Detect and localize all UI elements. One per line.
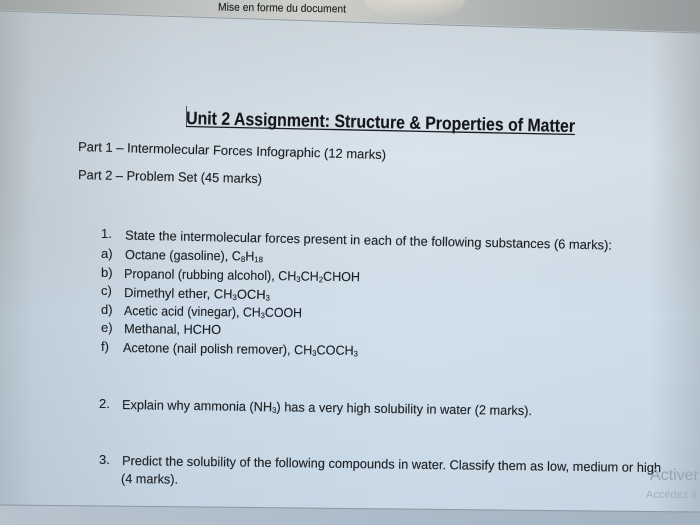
question 2: 3 [272, 406, 277, 415]
question 2 [99, 396, 532, 419]
question 2: ) has a very high solubility in water (2 marks). [276, 399, 532, 418]
title: Unit 2 Assignment: Structure & Properties of Matter [186, 108, 575, 136]
item b: 2 [319, 275, 324, 284]
item a: Octane (gasoline), C [125, 247, 244, 263]
question 1: State the intermolecular forces present in each of the following substances (6 marks): [125, 228, 612, 253]
item c: c) [101, 283, 112, 298]
question 3: Predict the solubility of the following compounds in water. Classify them as low, medium or high [122, 453, 661, 475]
question 2: 2. [99, 396, 110, 411]
watermark: activation notice: Accédez à [646, 489, 698, 501]
item d: Acetic acid (vinegar), CH [124, 303, 268, 320]
question 3: (4 marks). [121, 471, 178, 487]
item c: 3 [266, 293, 271, 303]
item f: f) [101, 339, 109, 354]
part 1 line: Part 1 – Intermolecular Forces Infographic (12 marks) [78, 139, 386, 162]
item d: d) [101, 302, 113, 317]
item d: COOH [265, 305, 302, 320]
item a: 8 [241, 255, 246, 264]
toolbar band at top [0, 0, 700, 33]
item c: 3 [232, 293, 237, 302]
item a [101, 246, 264, 264]
item b: CHOH [323, 269, 360, 284]
toolbar label: Mise en forme du document [218, 2, 346, 16]
item b: 3 [296, 275, 301, 284]
item b: b) [101, 265, 113, 280]
item d [101, 302, 302, 321]
item c: OCH [237, 287, 266, 302]
item c: Dimethyl ether, CH [124, 285, 233, 302]
item f: Acetone (nail polish remover), CH [123, 340, 318, 357]
item e: Methanal, HCHO [124, 321, 221, 337]
item f: 3 [354, 349, 359, 358]
item a: 18 [254, 255, 264, 264]
item f [101, 339, 359, 358]
item e: e) [101, 320, 113, 335]
question 1: 1. [101, 226, 112, 241]
bottom band below page edge [0, 505, 700, 525]
item f: 3 [312, 349, 317, 358]
question 2: Explain why ammonia (NH [122, 397, 275, 414]
item a: a) [101, 246, 113, 261]
item b: Propanol (rubbing alcohol), CH [124, 266, 303, 283]
watermark: activation notice: Activer [650, 467, 700, 484]
item d: 3 [261, 311, 265, 320]
item b [101, 265, 360, 285]
item a: H [245, 248, 254, 264]
watermark: activation notice [646, 467, 700, 501]
item c [101, 283, 271, 303]
item f: COCH [316, 342, 354, 358]
part 2 line: Part 2 – Problem Set (45 marks) [78, 167, 262, 186]
question 3: 3. [99, 452, 110, 467]
question 3 [99, 452, 661, 487]
item b: CH [301, 268, 319, 284]
